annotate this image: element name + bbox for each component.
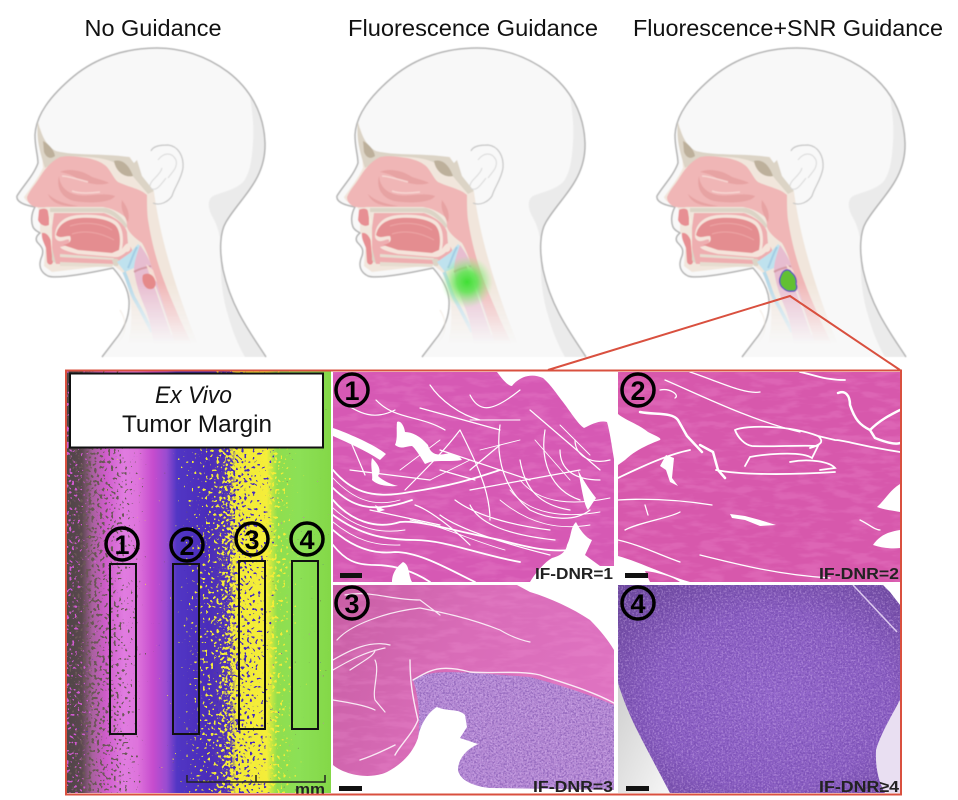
colour map bands [66, 370, 332, 795]
region 3 marker [236, 523, 268, 729]
lilac tumour region [413, 672, 614, 790]
tumor: unlabelled [142, 274, 156, 289]
region badge 4: 4 [630, 589, 646, 619]
region 4 marker: 4 [299, 525, 315, 555]
label: IF-DNR≥4 [819, 779, 899, 796]
tumor: delineated green margin [780, 270, 797, 291]
region 1 marker: 1 [114, 530, 130, 560]
region 4 marker [291, 523, 323, 729]
label box [70, 374, 323, 448]
region badge 3: 3 [344, 589, 360, 619]
region 1 marker [106, 528, 138, 734]
scale bar [187, 775, 325, 798]
pale tissue edges [618, 683, 670, 793]
region 3 marker: 3 [244, 525, 260, 555]
region badge 2 [622, 374, 654, 406]
panel: histology 2 [618, 372, 900, 583]
head anatomy: fluorescence guidance [337, 48, 586, 357]
title: Fluorescence+SNR Guidance: Fluorescence+SNR Guidance [633, 15, 943, 41]
region 2 marker: 2 [179, 531, 195, 561]
scale bar [339, 786, 362, 791]
region badge 1: 1 [344, 376, 360, 406]
head anatomy: fluorescence and SNR guidance [657, 48, 906, 357]
label: IF-DNR=3 [533, 779, 613, 796]
scale bar [626, 786, 649, 791]
region badge 4 [622, 587, 654, 619]
white background regions [333, 585, 614, 793]
region 2 marker [171, 529, 203, 734]
region badge 1 [336, 374, 368, 406]
label: IF-DNR=1 [535, 566, 613, 583]
panel: histology 3 [333, 585, 614, 796]
label: IF-DNR=2 [819, 566, 899, 583]
tumor: diffuse green glow [441, 256, 493, 308]
white tissue gaps [618, 414, 900, 582]
title: No Guidance: No Guidance [84, 15, 222, 41]
label box: Tumor Margin [122, 411, 272, 438]
scale bar: mm [295, 781, 325, 798]
connective tissue gaps [333, 422, 596, 512]
region badge 2: 2 [630, 376, 646, 406]
speckle overlays [66, 370, 332, 795]
head anatomy: no guidance [17, 48, 266, 357]
panel: histology 1 [333, 372, 615, 583]
panel: histology 4 [618, 585, 900, 796]
title: Fluorescence Guidance: Fluorescence Guidance [348, 15, 598, 41]
scale bar [340, 573, 362, 578]
scale bar [625, 573, 648, 578]
white background regions [392, 372, 615, 582]
zoom callout frame and connector [66, 296, 901, 794]
region badge 3 [336, 587, 368, 619]
panel: ex vivo tumor margin [66, 370, 332, 798]
label box: Ex Vivo [155, 382, 232, 409]
